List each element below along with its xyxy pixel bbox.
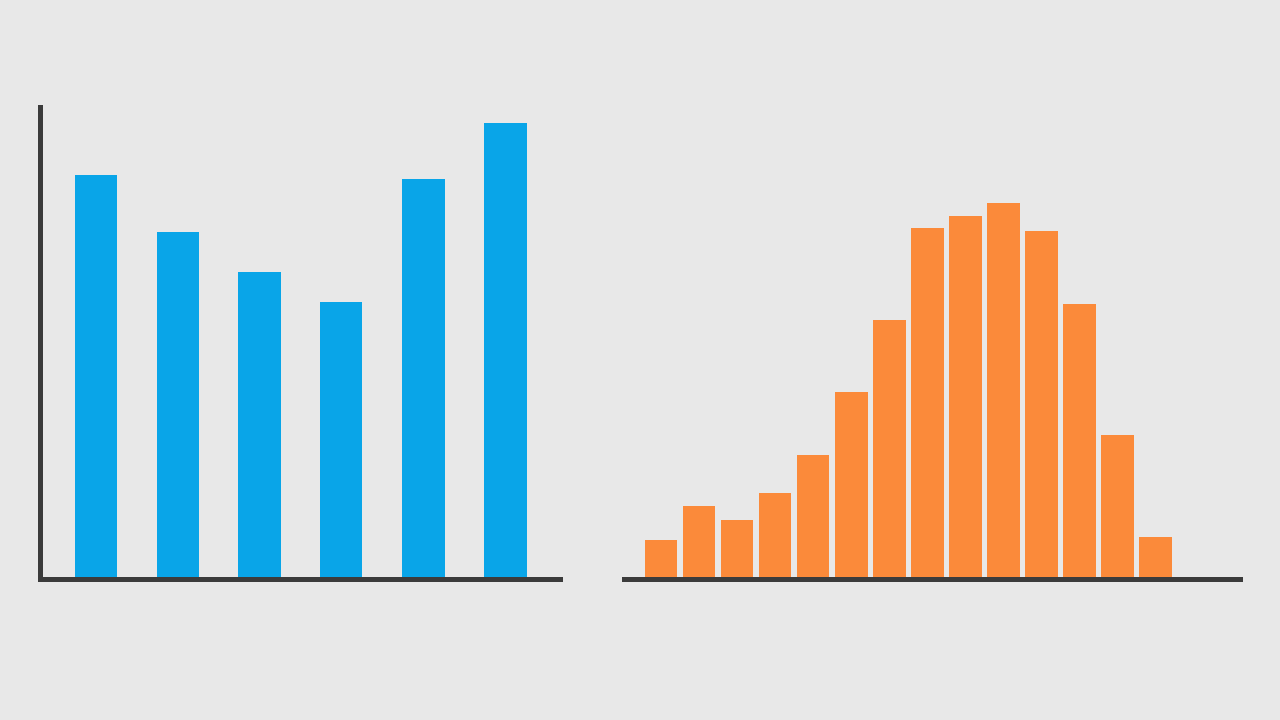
orange bars — [645, 203, 1172, 579]
chart: blue bar chart — [38, 105, 563, 582]
axis: right chart baseline — [622, 577, 1243, 582]
chart: orange histogram — [622, 203, 1243, 582]
axes: left chart — [38, 105, 563, 582]
blue bars — [75, 123, 527, 579]
